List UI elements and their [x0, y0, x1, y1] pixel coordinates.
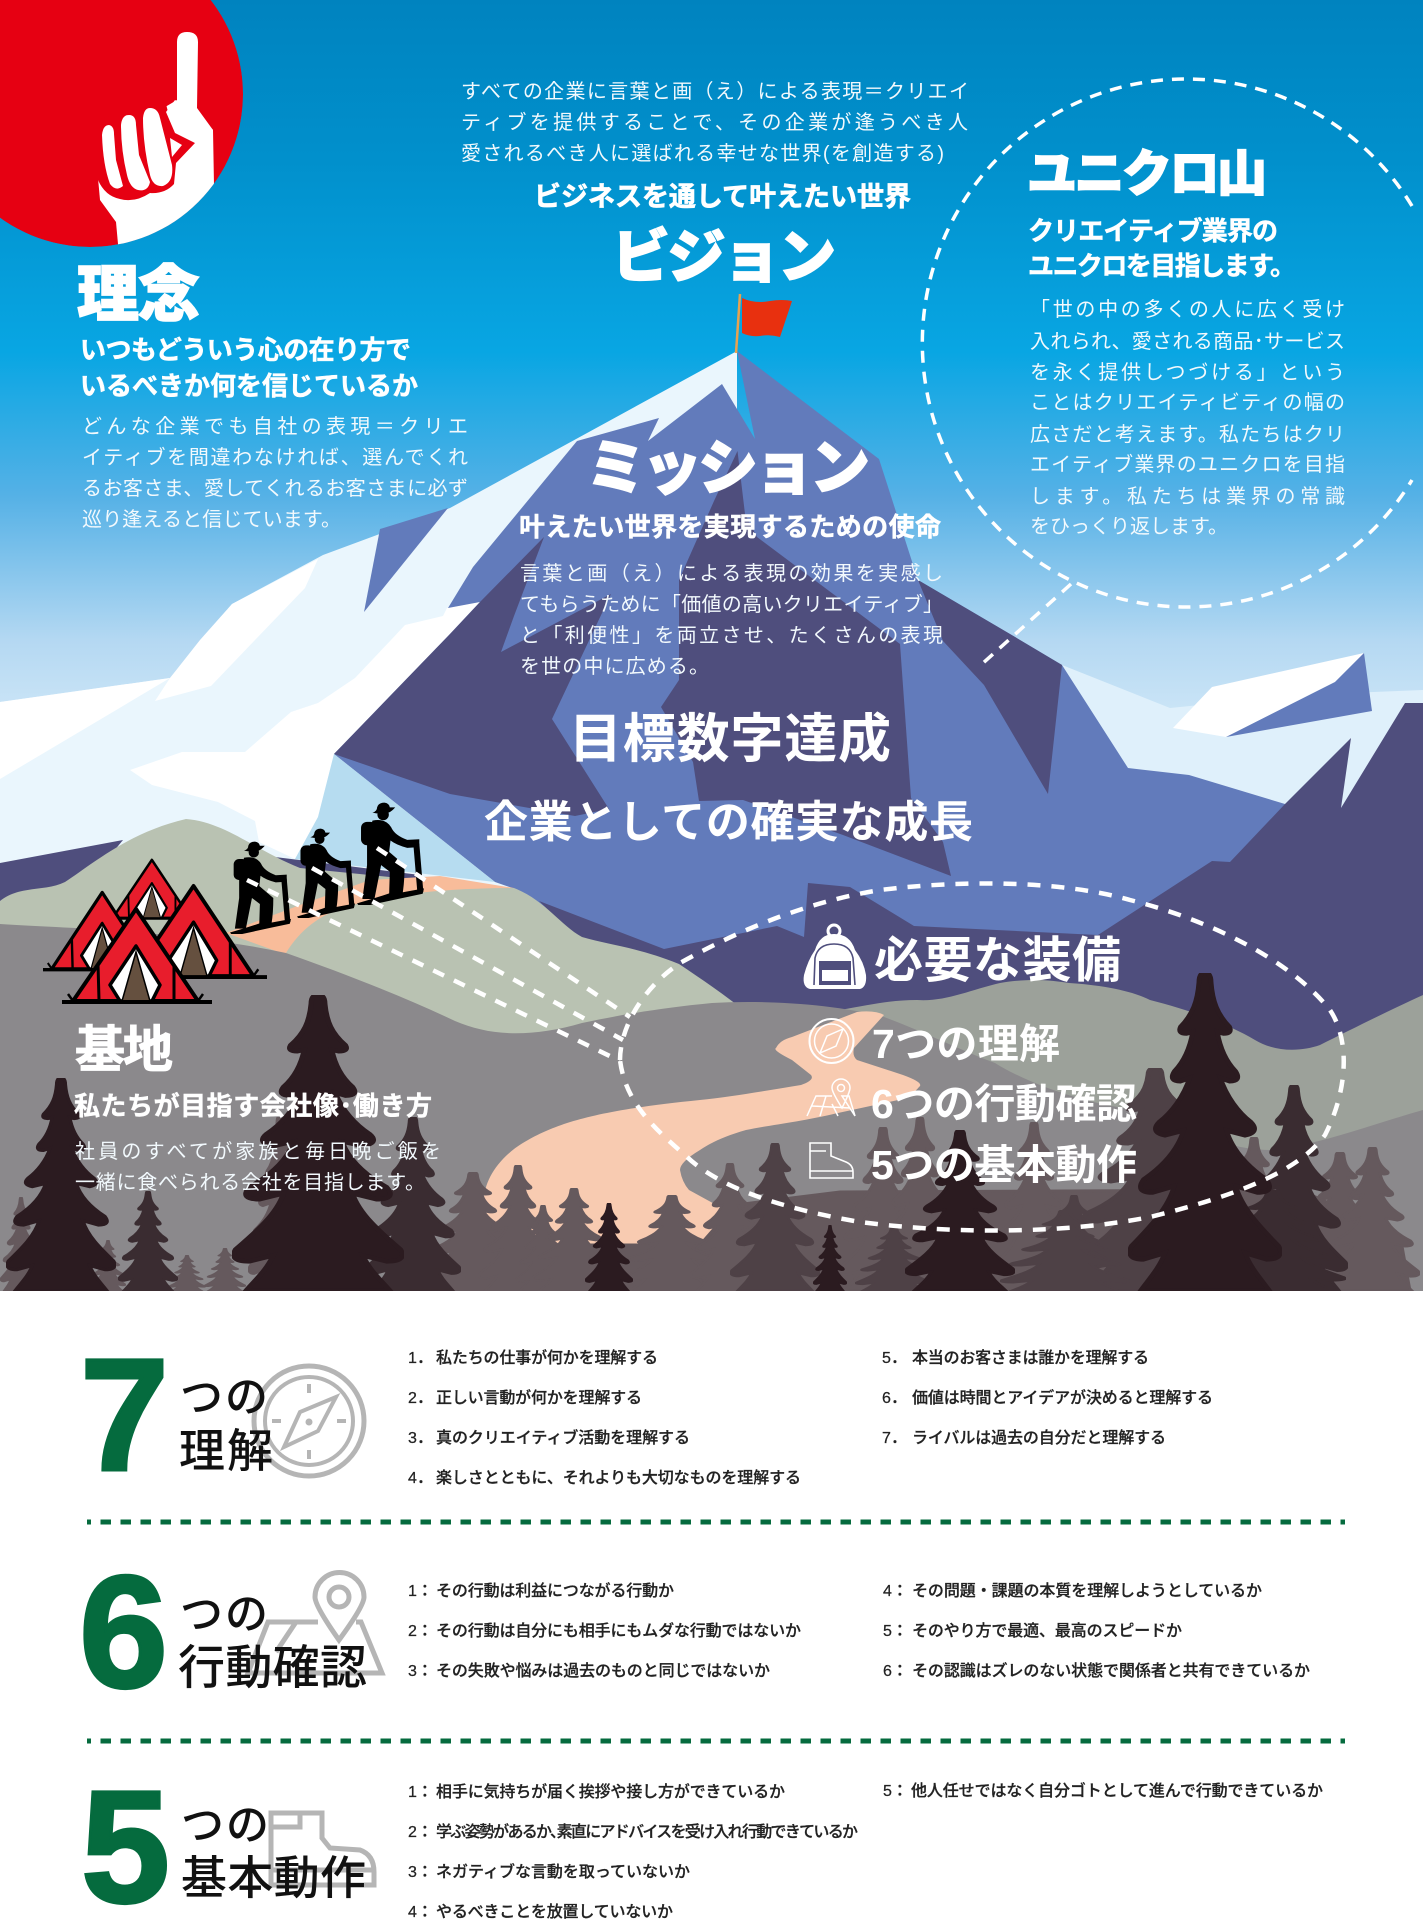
text: mission body: てもらうために「価値の高いクリエイティブ」 — [520, 592, 943, 616]
text: Uniqlo mountain body: を永く提供しつづける」という — [1030, 361, 1345, 384]
foreground dark trees — [7, 973, 1280, 1291]
text: Uniqlo mountain body: エイティブ業界のユニクロを目指 — [1030, 452, 1345, 476]
text: Uniqlo mountain body: 広さだと考えます。私たちはクリ — [1030, 423, 1345, 446]
heading: company growth: 企業としての確実な成長 — [484, 798, 973, 847]
text: mission body — [520, 562, 943, 678]
subheading: philosophy: いるべきか何を信じているか — [80, 371, 418, 401]
text: base camp body: 社員のすべてが家族と毎日晩ご飯を — [75, 1140, 441, 1163]
heading: numeric goal: 目標数字達成 — [569, 710, 891, 769]
list: five basic actions: 5： — [883, 1783, 908, 1800]
subheading: Uniqlo mountain: クリエイティブ業界の — [1028, 216, 1278, 246]
sky gradient — [0, 0, 1423, 708]
text: philosophy body: イティブを間違わなければ、選んでくれ — [82, 445, 468, 469]
list: seven understandings: 4． — [408, 1470, 433, 1487]
icon: boot small — [810, 1143, 853, 1178]
subheading: mission: 叶えたい世界を実現するための使命 — [519, 512, 941, 542]
subheading: base camp: 私たちが目指す会社像･働き方 — [74, 1091, 432, 1121]
text: philosophy body: るお客さま、愛してくれるお客さまに必ず — [82, 477, 468, 500]
dark forest layer — [119, 1085, 1347, 1291]
list: six action checks: その行動は自分にも相手にもムダな行動ではないか — [436, 1621, 801, 1640]
snow slopes — [0, 352, 737, 888]
hikers — [230, 803, 424, 934]
list: six action checks: 5： — [883, 1623, 908, 1640]
list: seven understandings — [408, 1348, 1213, 1487]
list: seven understandings: 楽しさとともに、それよりも大切なものを理解する — [436, 1469, 801, 1487]
text: vision statement: 愛されるべき人に選ばれる幸せな世界(を創造する) — [461, 142, 944, 165]
label: seven understandings: つの — [180, 1374, 268, 1422]
big number 7: 7 — [80, 1325, 169, 1504]
text: Uniqlo mountain body: をひっくり返します。 — [1030, 516, 1228, 538]
icon: compass small — [810, 1019, 854, 1063]
subheading: Uniqlo mountain — [1028, 216, 1296, 281]
list: six action checks: その失敗や悩みは過去のものと同じではないか — [436, 1662, 770, 1680]
list: six action checks — [408, 1581, 1310, 1680]
text: Uniqlo mountain body: ことはクリエイティビティの幅の — [1030, 391, 1345, 414]
text: vision statement: すべての企業に言葉と画（え）による表現＝クリエイ — [461, 80, 969, 103]
label: five basic actions: 基本動作 — [181, 1852, 366, 1904]
label: six action checks: つの — [180, 1591, 268, 1639]
list: six action checks: その問題・課題の本質を理解しようとしているか — [912, 1582, 1262, 1600]
text: mission body: を世の中に広める。 — [520, 655, 709, 678]
far right snow land — [1062, 665, 1423, 808]
dashed Uniqlo mountain bubble — [922, 79, 1412, 664]
subheading: philosophy — [80, 335, 418, 401]
section: seven understandings — [80, 1325, 1213, 1504]
text: base camp body — [75, 1140, 441, 1194]
centre green hill — [286, 888, 734, 1034]
list: seven understandings: 5． — [882, 1350, 907, 1367]
text: vision statement — [461, 80, 969, 165]
icon: map small — [807, 1079, 855, 1116]
text: Uniqlo mountain body: 「世の中の多くの人に広く受け — [1030, 298, 1345, 321]
light blue slope behind hikers — [295, 754, 495, 882]
list: seven understandings: 正しい言動が何かを理解する — [436, 1388, 642, 1407]
navy left ridge — [0, 840, 123, 905]
navy ridge behind hikers — [276, 857, 416, 878]
grey-green far hill — [844, 980, 1423, 1150]
list: seven understandings: 7． — [882, 1430, 907, 1447]
illustration: mountain landscape — [0, 0, 1423, 1291]
heading: vision subtitle: ビジネスを通して叶えたい世界 — [534, 182, 911, 212]
list: seven understandings: 本当のお客さまは誰かを理解する — [912, 1349, 1149, 1367]
icon: compass grey — [254, 1366, 364, 1476]
heading: vision: ビジョン — [612, 225, 836, 290]
list: six action checks: 1： — [408, 1583, 433, 1600]
text: mission body: と「利便性」を両立させ、たくさんの表現 — [520, 624, 943, 647]
list: five basic actions: 2： — [408, 1824, 433, 1841]
heading: base camp: 基地 — [75, 1022, 173, 1078]
text: philosophy body — [82, 415, 468, 531]
grey ground — [0, 924, 1423, 1291]
icon: map pin grey — [248, 1572, 382, 1673]
navy foreground mountains — [539, 703, 1423, 1050]
text: philosophy body: 巡り逢えると信じています。 — [82, 508, 341, 531]
back forest layer — [0, 1117, 1419, 1291]
list: seven understandings: 価値は時間とアイデアが決めると理解する — [912, 1388, 1213, 1407]
middle forest layer — [731, 1068, 1238, 1291]
icon: red sun with pointing hand — [0, 0, 243, 255]
list: six action checks: その認識はズレのない状態で関係者と共有できているか — [912, 1661, 1310, 1680]
text: Uniqlo mountain body — [1030, 298, 1345, 538]
heading: Uniqlo mountain: ユニクロ山 — [1027, 146, 1267, 202]
list: seven understandings: 3． — [408, 1430, 433, 1447]
list: five basic actions: 相手に気持ちが届く挨拶や接し方ができているか — [436, 1782, 785, 1801]
list: five basic actions: 他人任せではなく自分ゴトとして進んで行動できているか — [911, 1781, 1323, 1800]
list: five basic actions: 3： — [408, 1864, 433, 1881]
list: seven understandings: 6． — [882, 1390, 907, 1407]
text: philosophy body: どんな企業でも自社の表現＝クリエ — [82, 415, 468, 438]
list: seven understandings: 1． — [408, 1350, 433, 1367]
list: seven understandings: 2． — [408, 1390, 433, 1407]
navy faces of main mountain — [334, 451, 1062, 876]
label: six action checks: 行動確認 — [178, 1641, 367, 1694]
list: seven understandings: 私たちの仕事が何かを理解する — [436, 1348, 658, 1367]
icon: backpack — [804, 925, 866, 989]
list: six action checks: 3： — [408, 1663, 433, 1680]
list: five basic actions: 1： — [408, 1784, 433, 1801]
left green hill — [0, 819, 390, 951]
section: five basic actions — [81, 1757, 1323, 1920]
label: seven understandings — [179, 1374, 273, 1477]
list: six action checks: その行動は利益につながる行動か — [436, 1581, 674, 1600]
text: seven understandings: 7つの理解 — [872, 1021, 1060, 1067]
text: six action checks: 6つの行動確認 — [871, 1081, 1137, 1127]
label: five basic actions: つの — [181, 1802, 269, 1850]
list: five basic actions — [408, 1781, 1323, 1920]
label: five basic actions — [181, 1802, 366, 1904]
upper peach trail — [226, 876, 514, 955]
heading: mission: ミッション — [586, 435, 870, 502]
subheading: Uniqlo mountain: ユニクロを目指します。 — [1028, 251, 1296, 281]
tents — [43, 860, 267, 1002]
list: six action checks: そのやり方で最適、最高のスピードか — [912, 1622, 1182, 1640]
subheading: philosophy: いつもどういう心の在り方で — [80, 335, 411, 365]
text: base camp body: 一緒に食べられる会社を目指します。 — [75, 1171, 425, 1194]
list: six action checks: 4： — [883, 1583, 908, 1600]
big number 6: 6 — [79, 1542, 168, 1721]
list: seven understandings: 真のクリエイティブ活動を理解する — [436, 1428, 690, 1447]
dashed equipment bubble — [620, 883, 1344, 1231]
blue mountain base — [334, 351, 1285, 949]
text: vision statement: ティブを提供することで、その企業が逢うべき人 — [461, 110, 968, 134]
list: seven understandings: ライバルは過去の自分だと理解する — [912, 1429, 1166, 1447]
flag on summit — [736, 294, 792, 353]
list: five basic actions: 学ぶ姿勢があるか､素直にアドバイスを受け入れ行動できているか — [436, 1822, 858, 1841]
text: Uniqlo mountain body: します。私たちは業界の常識 — [1030, 485, 1345, 508]
label: seven understandings: 理解 — [179, 1425, 273, 1477]
list: six action checks: 2： — [408, 1623, 433, 1640]
section: six action checks — [79, 1542, 1310, 1721]
text: mission body: 言葉と画（え）による表現の効果を実感し — [520, 562, 943, 585]
list: six action checks: 6： — [883, 1663, 908, 1680]
heading: philosophy: 理念 — [77, 261, 200, 330]
snow patch on right peak — [1173, 653, 1372, 737]
heading: required equipment: 必要な装備 — [874, 934, 1121, 988]
lower peach trail — [484, 1011, 920, 1244]
label: six action checks — [178, 1591, 367, 1694]
list: five basic actions: ネガティブな言動を取っていないか — [436, 1862, 690, 1881]
dashed trails from hikers to equipment — [247, 848, 630, 1061]
text: Uniqlo mountain body: 入れられ、愛される商品･サービス — [1030, 330, 1345, 353]
text: five basic actions: 5つの基本動作 — [871, 1142, 1137, 1188]
icon: boot grey — [271, 1813, 374, 1885]
